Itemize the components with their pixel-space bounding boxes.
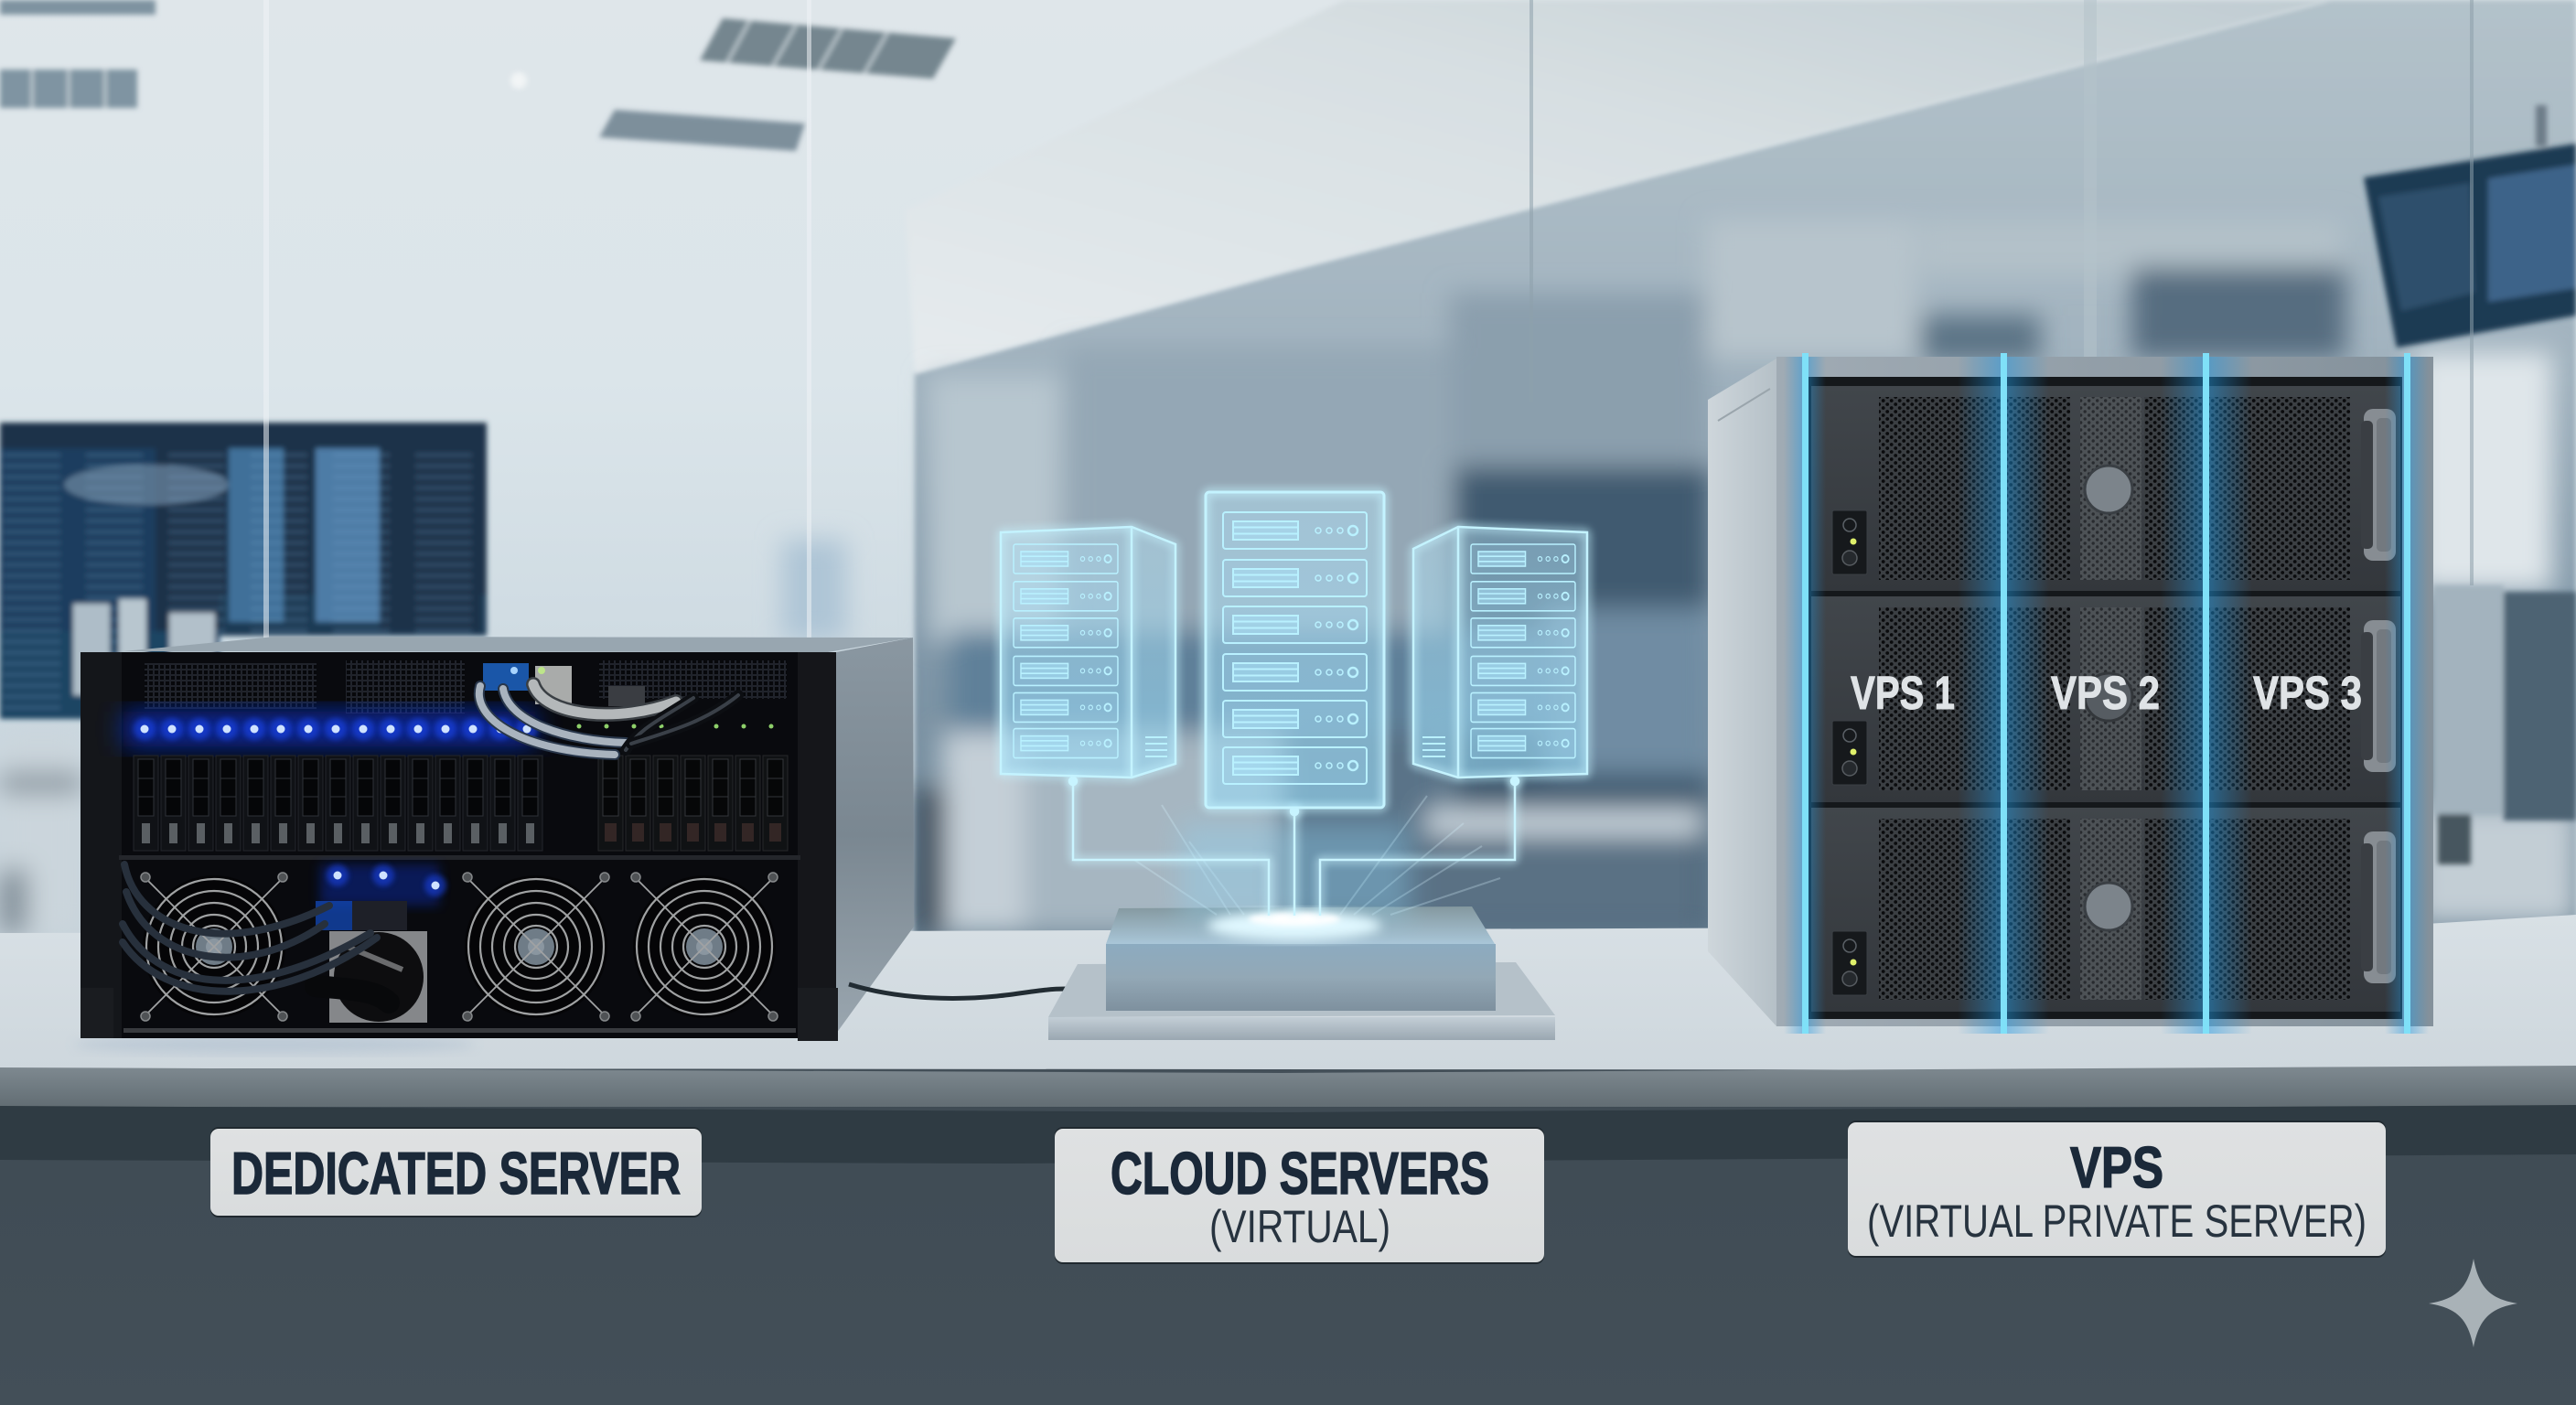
connection lines: [1069, 778, 1519, 916]
vps 3 label: VPS 3: [2253, 667, 2362, 719]
ventilation mesh: [145, 660, 787, 713]
label: vps: VPS: [2070, 1136, 2163, 1200]
desk lower cabinet: [0, 1105, 2576, 1405]
cabinet front frame: [1776, 357, 2433, 1026]
left server tower: [1001, 527, 1175, 778]
label: vps: [1848, 1121, 2386, 1258]
right server tower: [1413, 527, 1587, 778]
dedicated server: [73, 637, 1066, 1054]
left wall monitor: [0, 423, 487, 719]
blue status leds: [134, 718, 538, 740]
partition glow: [1784, 357, 2429, 1034]
label: vps: (VIRTUAL PRIVATE SERVER): [1867, 1196, 2367, 1247]
network ports: [483, 663, 645, 706]
right desk monitors: [2433, 585, 2576, 864]
vps 2 label: VPS 2: [2051, 667, 2160, 719]
rack feet: [80, 988, 838, 1041]
glass support lines: [263, 0, 2474, 640]
blurred office background: [0, 0, 2576, 951]
panel: bottom drawer: [1811, 808, 2400, 1012]
panel: middle drawer: [1811, 596, 2400, 802]
icon: sparkle watermark: [2429, 1259, 2517, 1347]
lower leds: [316, 864, 446, 930]
ceiling vents: [0, 0, 956, 151]
glass partition wall: [915, 0, 2576, 951]
drive led glow: [123, 712, 535, 746]
light rays: [1134, 796, 1500, 915]
drive bays: [134, 756, 788, 851]
label: cloud servers: [1055, 1127, 1544, 1264]
cabinet side inset line: [1718, 389, 1770, 421]
vps server: [1708, 353, 2433, 1034]
desk reflection: [73, 1035, 476, 1054]
chassis front: [80, 652, 836, 1038]
label: dedicated server: [210, 1127, 702, 1217]
label: cloud servers: CLOUD SERVERS: [1111, 1140, 1489, 1207]
hanging monitor top right: [2364, 105, 2576, 348]
pedestal block: [1106, 906, 1496, 1011]
green status leds: [576, 724, 774, 728]
base glow: [1208, 911, 1381, 940]
desk front edge: [0, 1066, 2576, 1114]
partition lines: [1802, 353, 2410, 1034]
label: dedicated server: DEDICATED SERVER: [231, 1140, 681, 1207]
white wall beam: [906, 0, 2331, 373]
vps 1 label: VPS 1: [1851, 667, 1955, 719]
pedestal base: [1048, 962, 1555, 1040]
cooling fans: [141, 873, 778, 1021]
centre server tower: [1206, 492, 1384, 808]
grey cables: [479, 684, 738, 755]
black cables: [123, 864, 377, 992]
panel: top drawer: [1811, 386, 2400, 591]
rooms behind the glass: [0, 220, 2576, 933]
cloud servers hologram: [1001, 492, 1587, 1040]
power supply: [316, 931, 427, 1023]
chassis top: [123, 637, 913, 652]
divider: [119, 855, 800, 860]
chassis side panel: [836, 638, 914, 1034]
desk surface: [0, 915, 2576, 1070]
cabinet side: [1708, 359, 1776, 1026]
label: cloud servers: (VIRTUAL): [1209, 1201, 1390, 1252]
power cord: [849, 984, 1066, 998]
